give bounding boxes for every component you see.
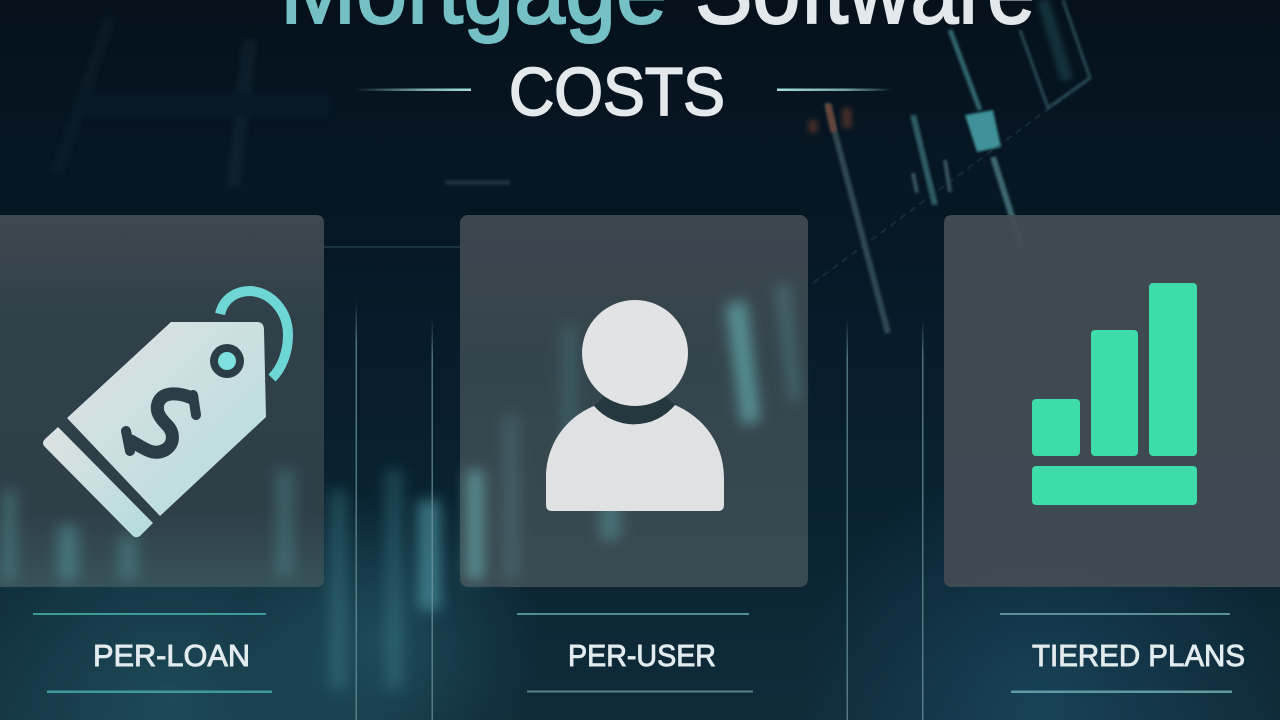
vertical dividers xyxy=(356,300,924,720)
card: per-loan xyxy=(0,215,324,587)
icon: person xyxy=(546,300,724,511)
icon: tiered bars xyxy=(1032,283,1197,505)
title rule left xyxy=(355,88,471,91)
panel: per-user xyxy=(460,215,808,587)
panel bars: per-user xyxy=(466,283,800,580)
label: tiered plans: TIERED PLANS xyxy=(1032,638,1245,673)
panel bars: per-loan xyxy=(2,470,294,580)
icon: dollar sign xyxy=(126,394,196,452)
card: tiered plans xyxy=(944,215,1280,587)
title rule right xyxy=(777,88,892,91)
label: per-loan: PER-LOAN xyxy=(93,638,250,673)
label: per-user: PER-USER xyxy=(568,638,716,673)
title line 1: Mortgage Software xyxy=(280,0,1035,44)
background chart: blurred bars xyxy=(330,470,440,690)
title xyxy=(280,0,1035,130)
background: faint upper-left streaks xyxy=(57,17,330,187)
panel: per-loan xyxy=(0,215,324,587)
background chart: candlesticks xyxy=(297,0,1090,333)
title line 2: COSTS: COSTS xyxy=(509,54,725,130)
icon: price tag xyxy=(43,291,288,537)
panel: tiered plans xyxy=(944,215,1280,587)
card: per-user xyxy=(460,215,808,587)
